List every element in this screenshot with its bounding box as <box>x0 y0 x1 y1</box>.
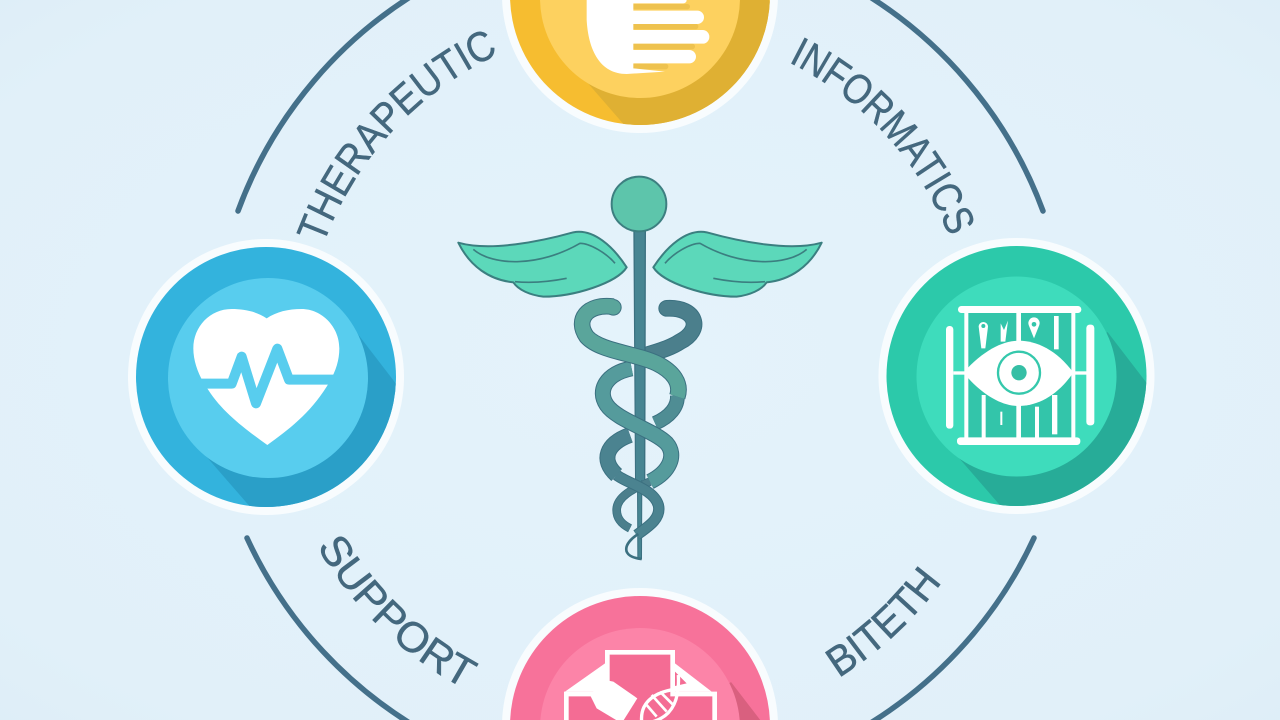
ring arc: top left <box>238 0 430 211</box>
ring arc: bottom left <box>247 538 430 720</box>
ring arc: top right <box>850 0 1043 211</box>
icon: cross, hand and DNA <box>565 652 715 720</box>
ring arc: bottom right <box>850 538 1034 720</box>
snake: left head lower strand <box>607 435 659 559</box>
icon: heart with pulse <box>192 309 339 445</box>
right wing <box>653 232 822 297</box>
icon: eye in frame <box>946 306 1094 445</box>
snake: middle strand <box>603 368 671 482</box>
snake: right head, behind staff <box>647 308 694 355</box>
badge: left blue heart <box>128 239 404 515</box>
label: support: SUPPORT <box>320 536 479 684</box>
label: biteth: BITETH <box>825 566 940 677</box>
snake: lower back strand <box>617 395 677 528</box>
snake: left head upper strand <box>582 299 678 397</box>
badge: bottom pink cross with DNA <box>502 588 778 720</box>
left wing <box>458 232 627 297</box>
label: therapeutic: THERAPEUTIC <box>296 32 494 236</box>
badge: right green eye <box>878 238 1154 514</box>
icon: hand <box>587 0 709 74</box>
badge: top yellow hand <box>502 0 778 133</box>
staff <box>633 231 646 559</box>
central caduceus symbol <box>458 177 822 559</box>
staff ball <box>612 177 666 231</box>
label: informatics: INFORMATICS <box>791 38 974 234</box>
